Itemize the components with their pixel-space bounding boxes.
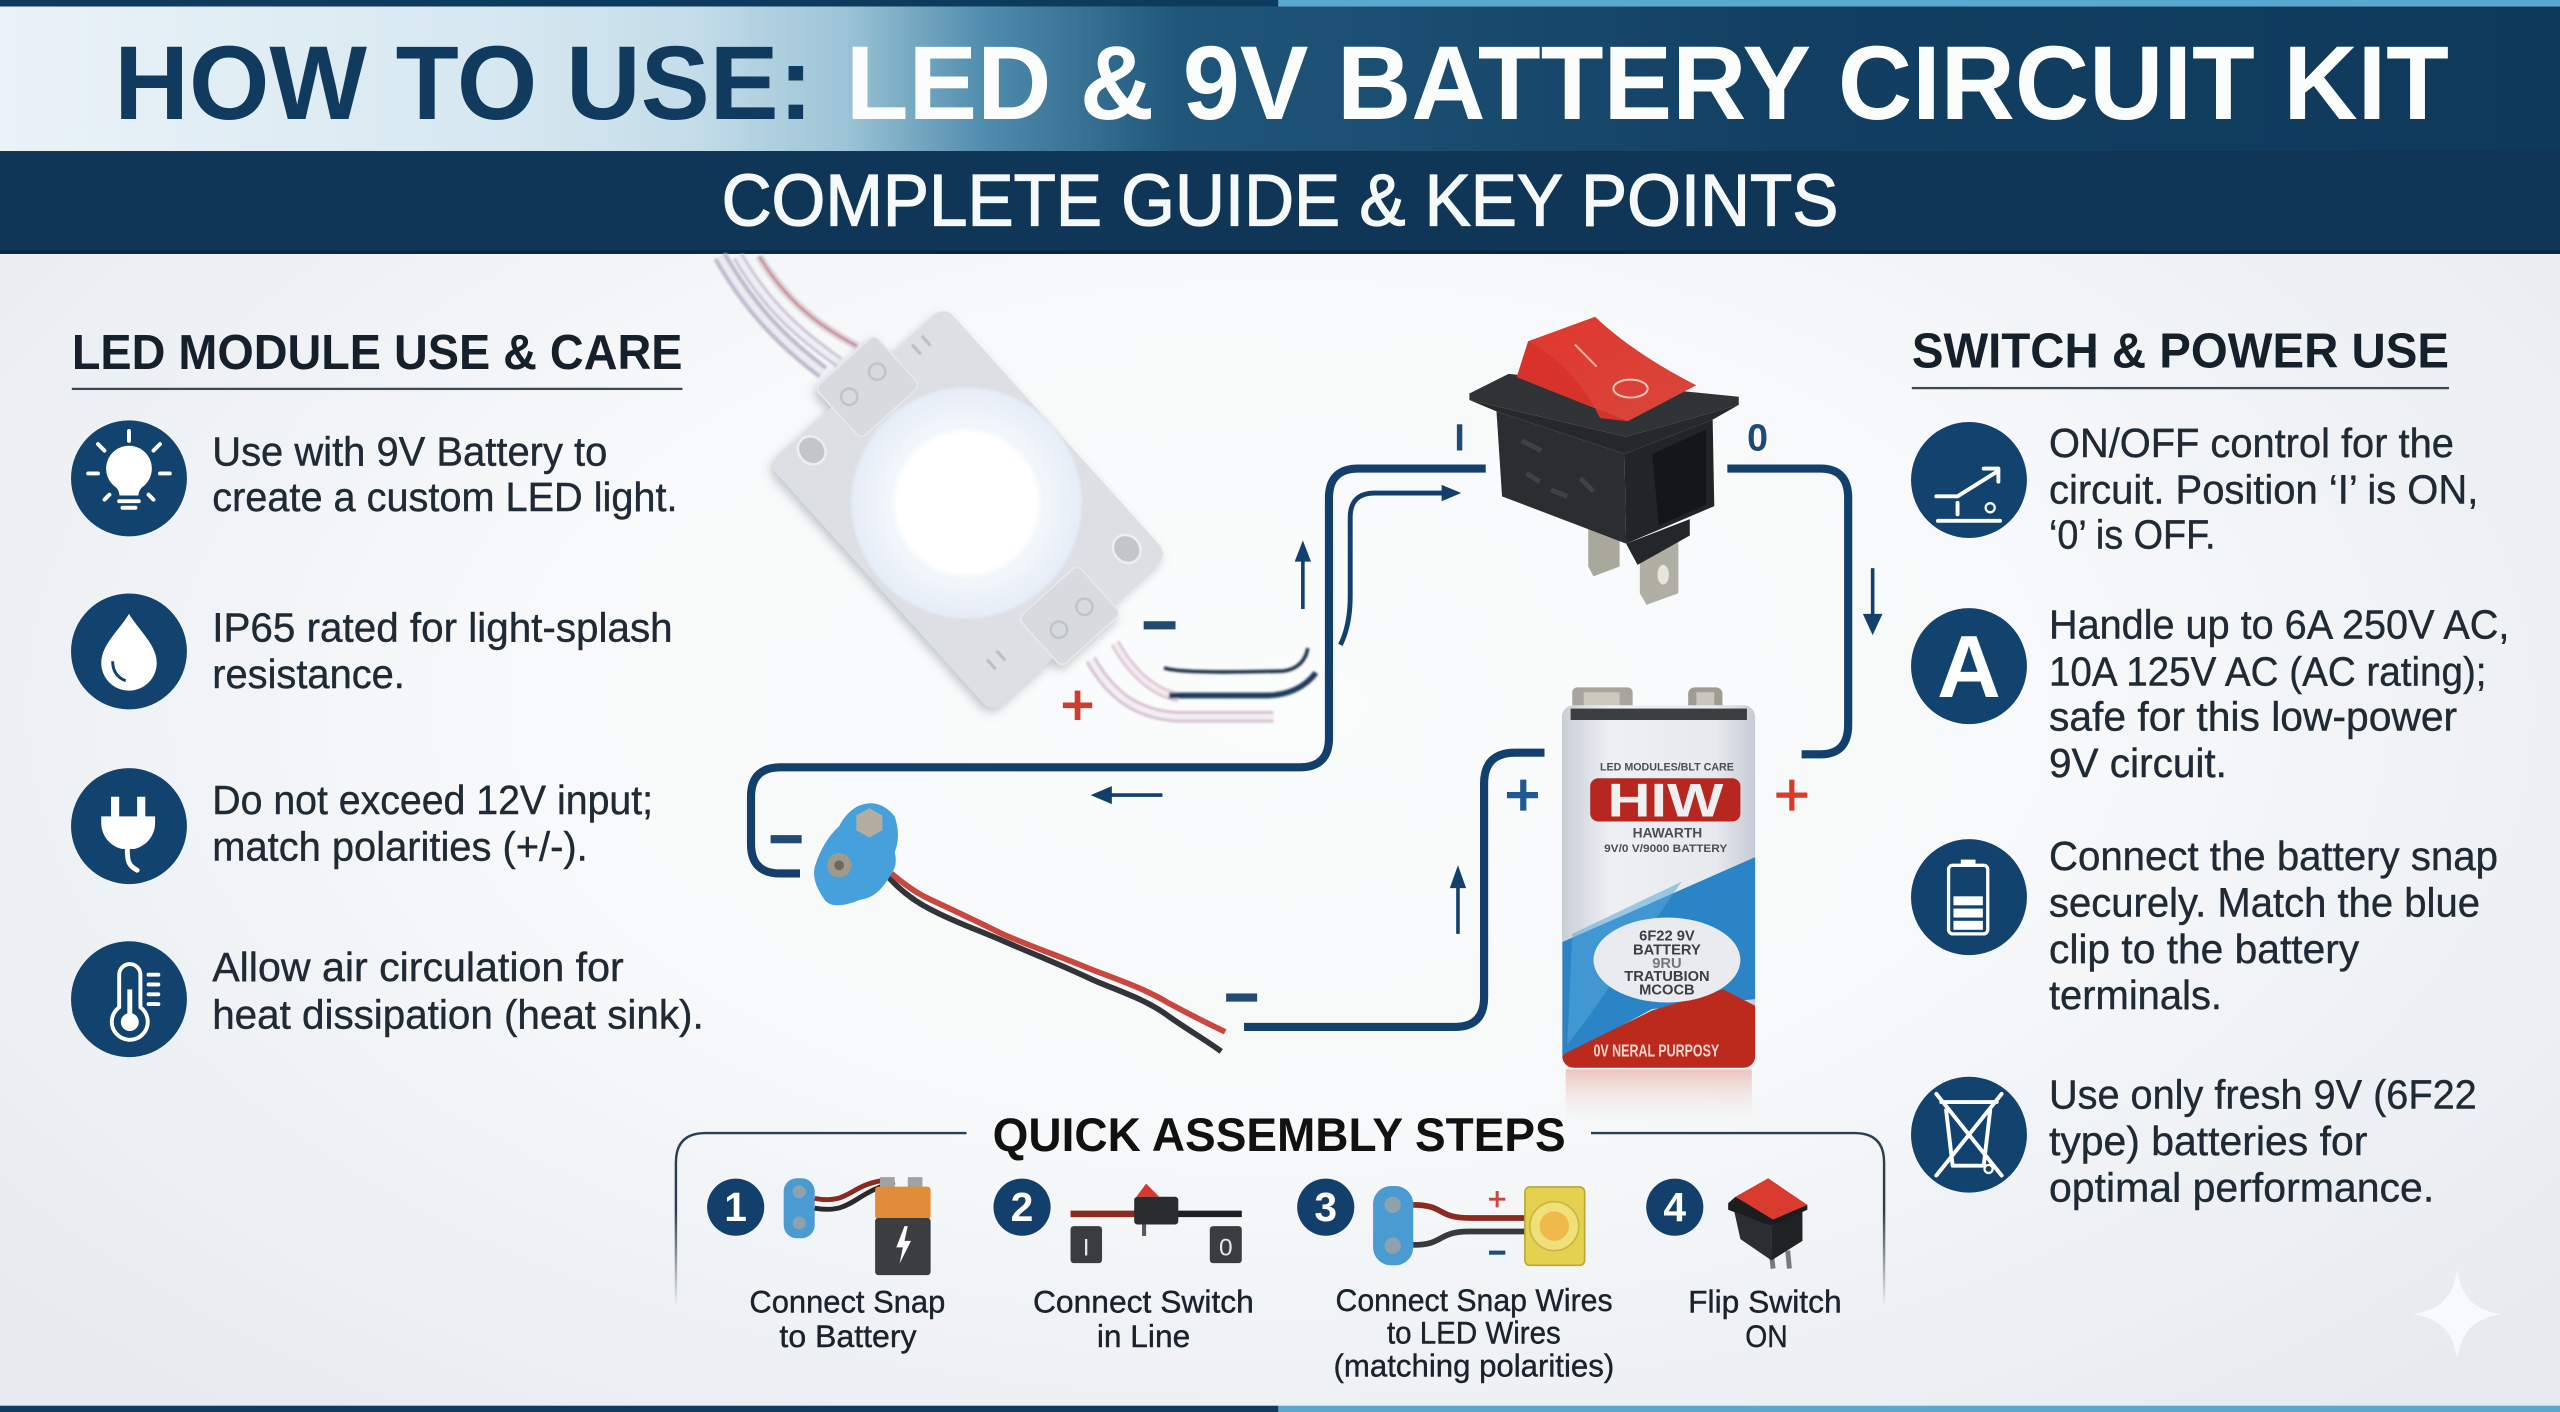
LED bottom wires [1091, 643, 1316, 717]
rocker switch: 0 [1747, 417, 1768, 459]
polarity marks battery [1507, 780, 1807, 811]
step 3: (matching polarities) [1334, 1347, 1614, 1383]
switch body [1496, 411, 1626, 544]
panel: LED module use and care [71, 326, 704, 1057]
header [0, 0, 2560, 254]
snap wires [888, 873, 1225, 1051]
step 1: 1 [724, 1184, 747, 1230]
item: 12V limit [71, 768, 653, 884]
item: heat dissipation [71, 941, 704, 1057]
item: IP65: resistance. [212, 651, 405, 697]
LED lens [851, 387, 1082, 619]
9V battery: BATTERY [1633, 942, 1701, 958]
9V battery: MCOCB [1639, 982, 1695, 998]
item: battery snap: securely. Match the blue [2049, 880, 2480, 926]
panel: switch and power use [1911, 324, 2509, 1211]
item: heat dissipation: Allow air circulation for [212, 944, 624, 990]
step 4: ON [1745, 1318, 1788, 1354]
9V battery: TRATUBION [1624, 969, 1710, 985]
item: heat dissipation: heat dissipation (heat sink). [212, 992, 704, 1038]
item: on/off control: ‘0’ is OFF. [2049, 512, 2216, 558]
switch flange [1469, 374, 1739, 437]
red wrap [1562, 989, 1755, 1068]
item: fresh batteries: optimal performance. [2049, 1165, 2434, 1211]
step 2 [993, 1179, 1254, 1354]
battery seal [1593, 918, 1740, 1002]
9V battery: 6F22 9V [1639, 928, 1695, 944]
heading: quick assembly: QUICK ASSEMBLY STEPS [993, 1109, 1566, 1162]
item: IP65 [71, 593, 673, 709]
step 3: to LED Wires [1387, 1315, 1561, 1351]
snap clip [814, 803, 898, 905]
panel frame [676, 1133, 1884, 1306]
switch terminals [1588, 519, 1620, 576]
item: 12V limit: match polarities (+/-). [212, 823, 588, 869]
item: battery snap: terminals. [2049, 972, 2222, 1018]
item: battery snap [1911, 833, 2498, 1018]
rocker switch [1454, 317, 1768, 605]
title highlight: LED & 9V BATTERY CIRCUIT KIT [846, 25, 2449, 142]
item: fresh batteries: type) batteries for [2049, 1118, 2367, 1164]
step 4: Flip Switch [1688, 1284, 1842, 1320]
9V battery [1507, 687, 1807, 1128]
item: on/off control: circuit. Position ‘I’ is ON, [2049, 467, 2478, 513]
step 4 [1646, 1178, 1842, 1354]
step 2: I [1083, 1235, 1090, 1262]
9V battery: 9RU [1652, 956, 1682, 972]
step 2: 2 [1011, 1184, 1033, 1230]
heading: switch: SWITCH & POWER USE [1912, 324, 2449, 378]
battery small print: HAWARTH [1633, 825, 1702, 841]
LED top wires [720, 256, 857, 372]
item: on/off control: ON/OFF control for the [2049, 420, 2454, 466]
item: current rating: 10A 125V AC (AC rating); [2049, 649, 2487, 695]
step 2: 0 [1219, 1235, 1233, 1262]
LED body [751, 287, 1176, 722]
item: fresh batteries [1911, 1072, 2477, 1211]
title: HOW TO USE: [114, 25, 813, 142]
step 2: in Line [1097, 1318, 1190, 1354]
item: battery snap: clip to the battery [2049, 926, 2360, 972]
item: fresh batteries: Use only fresh 9V (6F22 [2049, 1072, 2477, 1118]
item: current rating [1911, 601, 2509, 786]
switch rocker [1517, 317, 1696, 421]
blue wrap [1562, 857, 1755, 1058]
heading: LED module: LED MODULE USE & CARE [72, 326, 682, 380]
step 3: 3 [1314, 1184, 1337, 1230]
battery reflection [1566, 1069, 1752, 1128]
step 1: to Battery [779, 1318, 917, 1354]
battery body [1562, 705, 1755, 1068]
bottom strip [0, 1406, 2560, 1412]
battery small print [1600, 762, 1734, 855]
9V battery: 0V NERAL PURPOSY [1593, 1040, 1720, 1060]
step 4: 4 [1663, 1184, 1686, 1230]
switch labels: I [1454, 417, 1465, 459]
battery small print: 9V/0 V/9000 BATTERY [1604, 843, 1728, 855]
circuit wires [751, 469, 1848, 1027]
item: 9V battery use [71, 420, 678, 536]
step 1: Connect Snap [749, 1284, 945, 1320]
flow arrows [1091, 485, 1882, 934]
battery terminals [1572, 687, 1722, 720]
item: IP65: IP65 rated for light-splash [212, 605, 673, 651]
item: current rating: 9V circuit. [2049, 740, 2227, 786]
step 2: Connect Switch [1033, 1284, 1254, 1320]
step 1 [707, 1177, 945, 1354]
item: current rating: Handle up to 6A 250V AC, [2049, 601, 2509, 647]
brand banner [1590, 778, 1740, 822]
9V battery: HIW [1608, 774, 1724, 827]
battery small print: LED MODULES/BLT CARE [1600, 762, 1734, 774]
item: 9V battery use: create a custom LED light. [212, 474, 678, 520]
battery snap connector [771, 803, 1257, 1051]
item: current rating: A [1937, 617, 2001, 716]
step 3: Connect Snap Wires [1336, 1282, 1613, 1318]
item: 12V limit: Do not exceed 12V input; [212, 777, 653, 823]
item: on/off control [1911, 420, 2478, 558]
polarity marks LED [1063, 621, 1176, 720]
sparkle mark [2413, 1270, 2501, 1358]
LED module photo [720, 256, 1316, 722]
item: 9V battery use: Use with 9V Battery to [212, 428, 607, 474]
item: battery snap: Connect the battery snap [2049, 833, 2498, 879]
panel: quick assembly steps [676, 1109, 1884, 1383]
subtitle: COMPLETE GUIDE & KEY POINTS [722, 158, 1838, 241]
item: current rating: safe for this low-power [2049, 694, 2457, 740]
step 3 [1297, 1179, 1614, 1383]
